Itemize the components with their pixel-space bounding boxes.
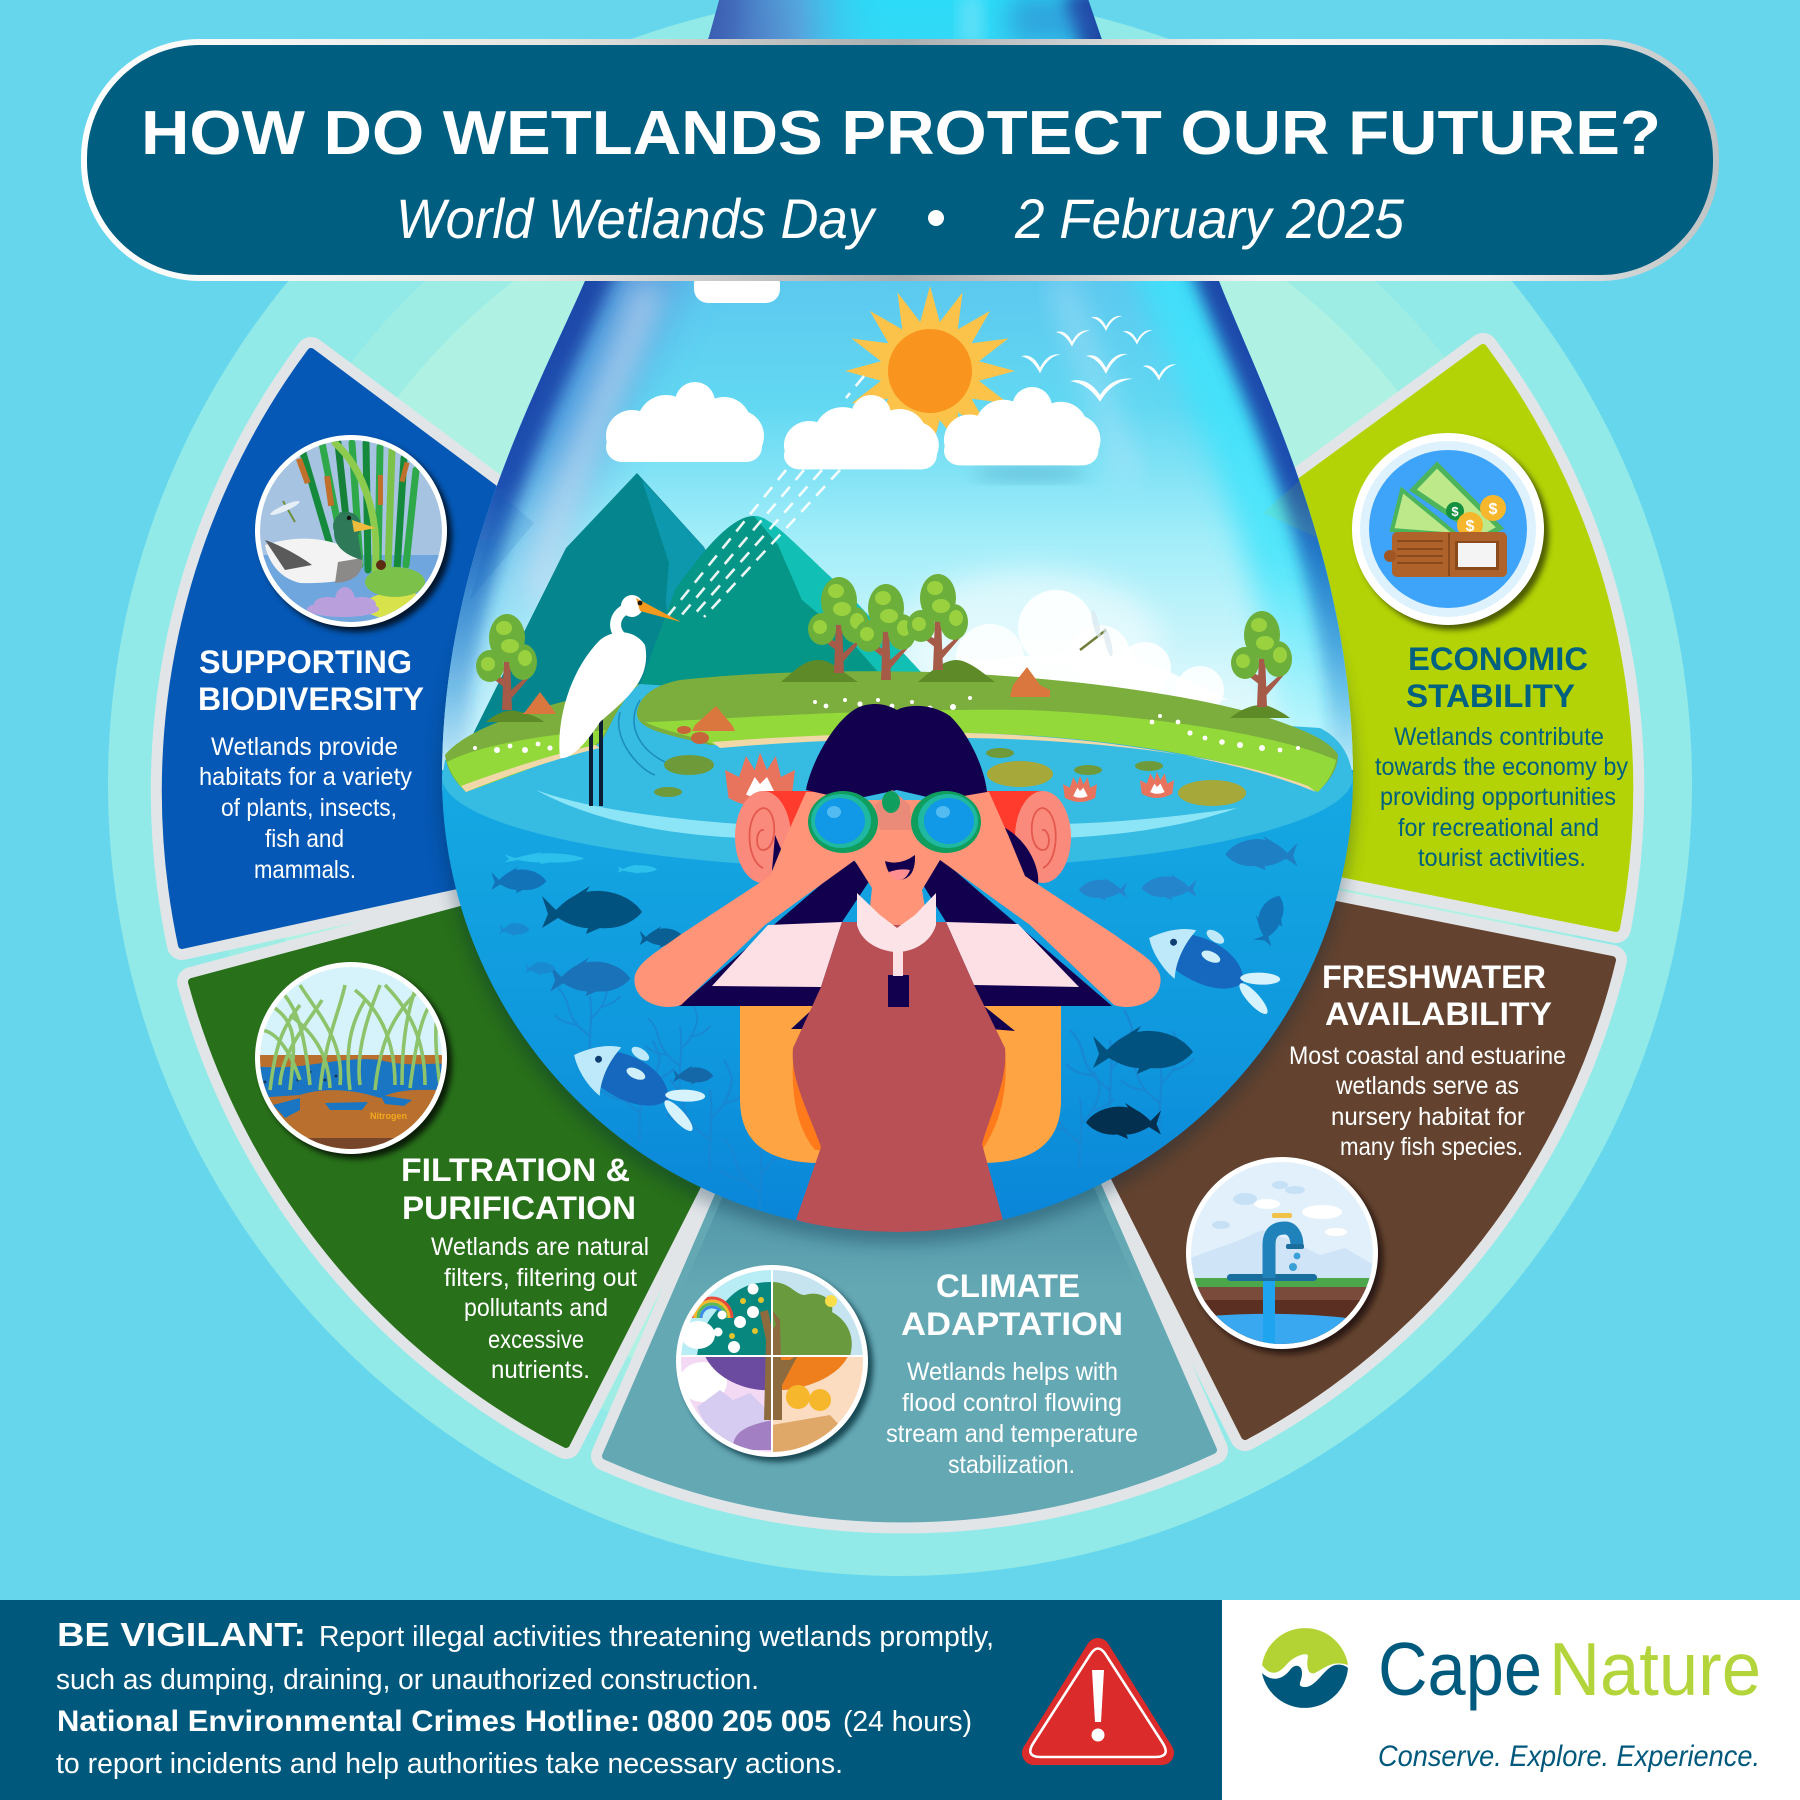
- panel: capenature logo: [1222, 1600, 1800, 1800]
- icon: duck and reeds: [255, 435, 452, 632]
- logo wordmark: Nature: [1549, 1627, 1761, 1711]
- vigilant text: [56, 1616, 994, 1780]
- text: climate adaptation: CLIMATE: [936, 1268, 1080, 1304]
- text: supporting biodiversity: mammals.: [254, 856, 356, 884]
- text: economic stability: STABILITY: [1406, 678, 1575, 714]
- text: supporting biodiversity: fish and: [265, 825, 344, 853]
- text: supporting biodiversity: Wetlands provide: [211, 733, 398, 761]
- text: economic stability: Wetlands contribute: [1394, 723, 1604, 751]
- text: filtration and purification: pollutants and: [464, 1294, 608, 1322]
- icon: water tap: [1186, 1157, 1383, 1354]
- panel: climate adaptation wedge: [606, 1054, 1213, 1518]
- vigilant text: BE VIGILANT:: [57, 1616, 306, 1653]
- dragonfly: [1080, 609, 1115, 657]
- subtitle: World Wetlands Day: [396, 187, 877, 250]
- text: supporting biodiversity: SUPPORTING: [199, 644, 412, 680]
- swimming fish: [491, 836, 1297, 1139]
- icon: seasons tree: [676, 1265, 873, 1462]
- edge glow and streaks: [442, 0, 1353, 777]
- logo wordmark: Cape: [1378, 1627, 1542, 1711]
- small top cloud: [694, 281, 780, 303]
- icon: wallet with money: $: [1466, 518, 1475, 535]
- icon: wetland filtration: Nitrogen: [370, 1111, 407, 1122]
- vigilant text: 0800 205 005: [647, 1705, 831, 1738]
- text: freshwater availability: FRESHWATER: [1322, 959, 1546, 995]
- text: climate adaptation: ADAPTATION: [901, 1306, 1123, 1342]
- vigilant text: National Environmental Crimes Hotline:: [57, 1705, 640, 1738]
- egret: [559, 595, 681, 806]
- zip: [888, 950, 909, 1007]
- text: filtration and purification: [401, 1152, 649, 1384]
- white distant clouds: [900, 570, 1228, 714]
- header pill: [84, 42, 1716, 278]
- logo wordmark: [1378, 1627, 1761, 1711]
- panel: filtration wedge: [192, 862, 760, 1444]
- text: climate adaptation: stabilization.: [948, 1451, 1075, 1479]
- neck and face: [848, 800, 946, 925]
- hair: [806, 704, 987, 800]
- water drop scene: [430, 0, 1370, 1240]
- vigilant text: to report incidents and help authorities take necessary actions.: [56, 1748, 843, 1780]
- text: supporting biodiversity: habitats for a variety: [199, 763, 412, 791]
- icon: wallet with money: $: [1489, 501, 1498, 518]
- lotus flowers: [725, 752, 1174, 807]
- icon: wallet with money: [1352, 433, 1549, 630]
- logo tagline: Conserve. Explore. Experience.: [1378, 1740, 1760, 1773]
- vigilant text: Report illegal activities threatening wetlands promptly,: [319, 1621, 994, 1653]
- vigilant text: such as dumping, draining, or unauthorized construction.: [56, 1664, 759, 1696]
- text: freshwater availability: AVAILABILITY: [1325, 996, 1552, 1032]
- concentric background rings: [108, 0, 1692, 1576]
- sky: [430, 0, 1370, 790]
- panel: freshwater wedge: [1060, 868, 1612, 1436]
- text: filtration and purification: Wetlands are natural: [431, 1233, 649, 1261]
- text: climate adaptation: flood control flowing: [902, 1389, 1122, 1417]
- text: freshwater availability: wetlands serve as: [1335, 1072, 1519, 1100]
- text: economic stability: ECONOMIC: [1408, 641, 1588, 677]
- mouth: [885, 855, 915, 880]
- panel: supporting biodiversity wedge: [166, 352, 640, 945]
- drop shadow under water drop: [439, 328, 1355, 1244]
- text: filtration and purification: filters, filtering out: [444, 1264, 637, 1292]
- text: filtration and purification: excessive: [488, 1326, 584, 1354]
- dress: [793, 922, 1005, 1234]
- back land: [637, 671, 1338, 792]
- meadow flowers: [473, 696, 1300, 753]
- text: filtration and purification: nutrients.: [491, 1356, 590, 1384]
- title: HOW DO WETLANDS PROTECT OUR FUTURE?: [141, 99, 1661, 168]
- text: economic stability: providing opportunities: [1380, 783, 1616, 811]
- left land: [445, 684, 640, 792]
- text: filtration and purification: FILTRATION &: [401, 1152, 630, 1188]
- text: supporting biodiversity: BIODIVERSITY: [198, 681, 424, 717]
- text: climate adaptation: [886, 1268, 1138, 1479]
- collar: [857, 893, 936, 952]
- text: economic stability: [1375, 641, 1628, 872]
- rain dashes: [667, 376, 864, 617]
- panel: economic stability wedge: [1150, 348, 1629, 928]
- deep water: [430, 770, 1370, 1240]
- water rim highlight: [536, 790, 1237, 838]
- icon: wetland filtration: [255, 962, 452, 1159]
- vigilant text: (24 hours): [843, 1706, 972, 1738]
- bedroll: [735, 791, 1071, 883]
- text: freshwater availability: Most coastal and estuarine: [1289, 1042, 1566, 1070]
- icon: wallet with money: $: [1451, 504, 1459, 519]
- text: economic stability: tourist activities.: [1418, 844, 1586, 872]
- subtitle: [396, 187, 1405, 250]
- bushes and rocks: [486, 660, 1290, 744]
- icon: warning triangle: [1030, 1648, 1166, 1757]
- text: economic stability: for recreational and: [1398, 814, 1599, 842]
- text: supporting biodiversity: of plants, insects,: [221, 794, 397, 822]
- text: climate adaptation: stream and temperature: [886, 1420, 1138, 1448]
- pink shoulder capes: [712, 922, 1079, 987]
- text: freshwater availability: [1289, 959, 1566, 1161]
- backpack: [740, 1002, 1061, 1163]
- pond surface: [442, 684, 1353, 869]
- sun: [845, 286, 1015, 434]
- text: freshwater availability: many fish species.: [1340, 1133, 1523, 1161]
- sector reflections through glass: [470, 480, 1338, 600]
- back hair and jacket: [679, 825, 1112, 1031]
- water ripples: [619, 700, 665, 775]
- coral silhouettes: [555, 972, 1194, 1220]
- text: supporting biodiversity: [198, 644, 424, 884]
- trees: [476, 574, 1292, 710]
- clouds: [606, 382, 1100, 481]
- lily pads: [654, 748, 1246, 806]
- subtitle: 2 February 2025: [1014, 187, 1405, 250]
- icon: logo mark: [1262, 1628, 1348, 1708]
- mountains: [473, 473, 921, 734]
- top gradient above header: [708, 0, 1100, 39]
- binoculars: [808, 790, 981, 853]
- girl with binoculars: [634, 704, 1161, 1234]
- text: freshwater availability: nursery habitat for: [1331, 1103, 1525, 1131]
- birds: [1021, 316, 1177, 402]
- text: climate adaptation: Wetlands helps with: [907, 1358, 1118, 1386]
- text: filtration and purification: PURIFICATION: [402, 1190, 636, 1226]
- arms: [634, 792, 1161, 1007]
- text: economic stability: towards the economy by: [1375, 753, 1628, 781]
- panel: be vigilant band: [0, 1600, 1222, 1800]
